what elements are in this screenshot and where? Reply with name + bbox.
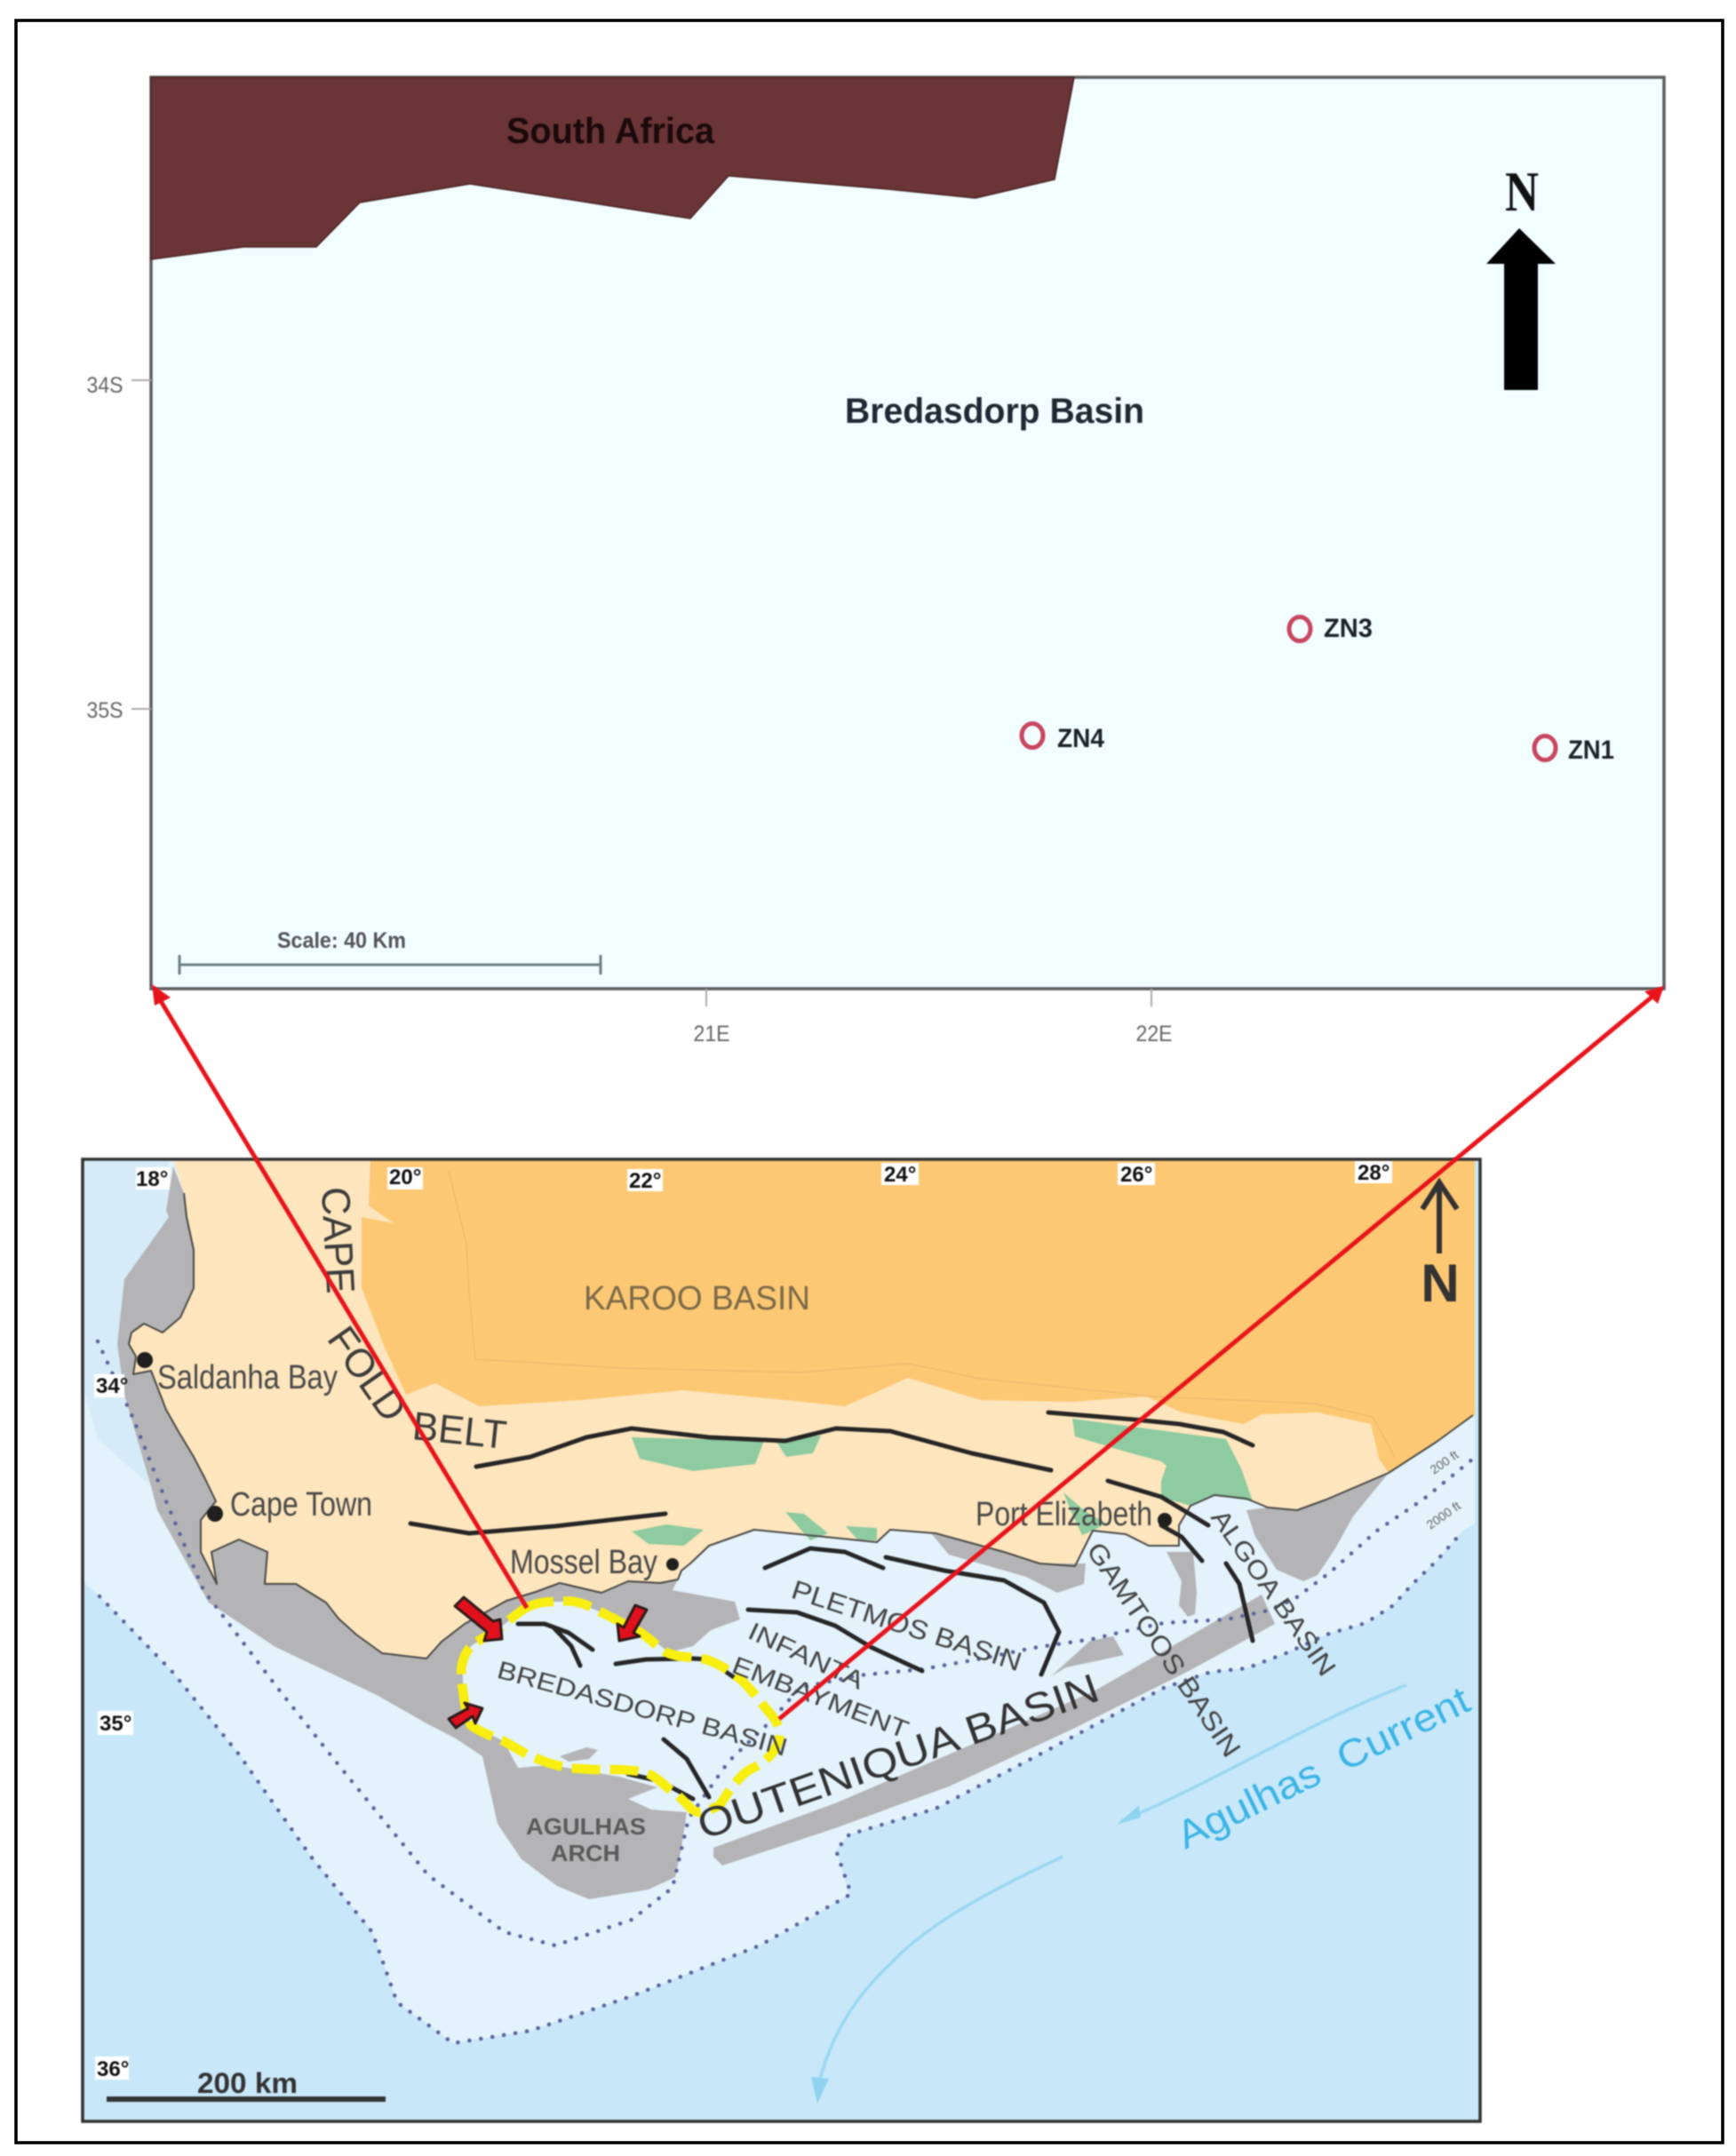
graticule labels: 26° (1120, 1163, 1152, 1187)
label: Bredasdorp Basin: Bredasdorp Basin (845, 392, 1144, 431)
label: Cape Fold Belt: CAPE (313, 1186, 363, 1294)
basin labels: ALGOA BASIN (1205, 1505, 1341, 1682)
graticule labels: 35° (100, 1712, 131, 1736)
well ZN1 (1534, 736, 1614, 765)
isobath labels (1424, 1447, 1463, 1531)
well ZN3: ZN3 (1324, 614, 1373, 643)
place labels (157, 1280, 1152, 1581)
panel: regional map of southern Africa offshore basins (83, 1159, 1480, 2121)
continental shelf (83, 1159, 1475, 2043)
label: Cape Fold Belt (313, 1186, 509, 1458)
latitude axis: 34S (87, 373, 123, 398)
basin labels: PLETMOS BASIN (788, 1575, 1025, 1677)
north arrow (1486, 160, 1556, 390)
red pointer arrow 1 (455, 1597, 502, 1641)
basin labels: AGULHAS (526, 1813, 646, 1840)
north arrow: N (1505, 160, 1539, 223)
well ZN1: ZN1 (1568, 736, 1614, 765)
faults (410, 1412, 1253, 1799)
graticule labels: 24° (884, 1163, 916, 1187)
well ZN4: ZN4 (1057, 724, 1104, 753)
scale bar: 40 km: Scale: 40 Km (277, 928, 406, 953)
place labels: KAROO BASIN (584, 1280, 810, 1317)
red pointer arrow 2 (617, 1605, 647, 1641)
place labels: Mossel Bay (510, 1544, 657, 1581)
red connector line: left (152, 984, 527, 1608)
label: Cape Fold Belt: BELT (410, 1403, 509, 1458)
basin labels: EMBAYMENT (729, 1651, 912, 1744)
graticule labels (94, 1161, 1392, 2081)
graticule labels: 20° (389, 1166, 421, 1189)
longitude axis: 21E (693, 1022, 730, 1046)
map frame (83, 1159, 1480, 2121)
graticule labels: 18° (136, 1167, 168, 1191)
green outcrops (632, 1419, 1253, 1546)
label: Cape Fold Belt: FOLD (319, 1317, 416, 1429)
western sea (83, 1159, 169, 1486)
panel: study area map (87, 77, 1664, 1046)
town markers (137, 1352, 1172, 1571)
label: Agulhas Current: Agulhas Current (1170, 1678, 1477, 1858)
Bredasdorp Basin outline (461, 1601, 780, 1812)
Agulhas current arrows (811, 1685, 1406, 2104)
place labels: Port Elizabeth (976, 1496, 1152, 1533)
latitude axis: 35S (87, 698, 123, 723)
land: South Africa (151, 77, 1074, 259)
longitude axis (693, 989, 1173, 1046)
red connector line: right (779, 986, 1664, 1719)
label: South Africa: South Africa (506, 110, 715, 151)
basin labels: GAMTOOS BASIN (1080, 1537, 1246, 1762)
land (129, 1159, 1475, 1659)
graticule labels: 36° (97, 2057, 129, 2081)
basin labels: INFANTA (744, 1617, 869, 1695)
isobath labels: 2000 ft (1424, 1499, 1463, 1531)
isobath labels: 200 ft (1428, 1447, 1461, 1476)
grey sedimentary basins and arch (117, 1166, 1389, 1899)
place labels: Saldanha Bay (157, 1359, 338, 1396)
latitude axis (87, 373, 151, 723)
basin labels: ARCH (551, 1840, 620, 1866)
isobaths (98, 1341, 1472, 2043)
basin labels (494, 1505, 1341, 1866)
ocean (83, 1159, 1480, 2121)
Karoo Basin (362, 1159, 1475, 1473)
basin labels: OUTENIQUA BASIN (691, 1665, 1104, 1848)
graticule labels: 34° (96, 1374, 128, 1398)
longitude axis: 22E (1135, 1022, 1173, 1046)
place labels: Cape Town (230, 1486, 372, 1524)
graticule labels: 28° (1358, 1161, 1390, 1185)
graticule labels: 22° (629, 1169, 661, 1193)
coastline (129, 1193, 1473, 1659)
scale bar: 40 km (179, 928, 601, 975)
well ZN3 (1289, 614, 1373, 643)
north arrow: N (1421, 1253, 1460, 1313)
faint Karoo contour (449, 1171, 1395, 1457)
scale bar: 200 km: 200 km (197, 2067, 298, 2099)
north arrow (1421, 1182, 1460, 1313)
well ZN4 (1022, 723, 1104, 753)
basin labels: BREDASDORP BASIN (494, 1656, 791, 1762)
red pointer arrow 3 (449, 1703, 482, 1728)
